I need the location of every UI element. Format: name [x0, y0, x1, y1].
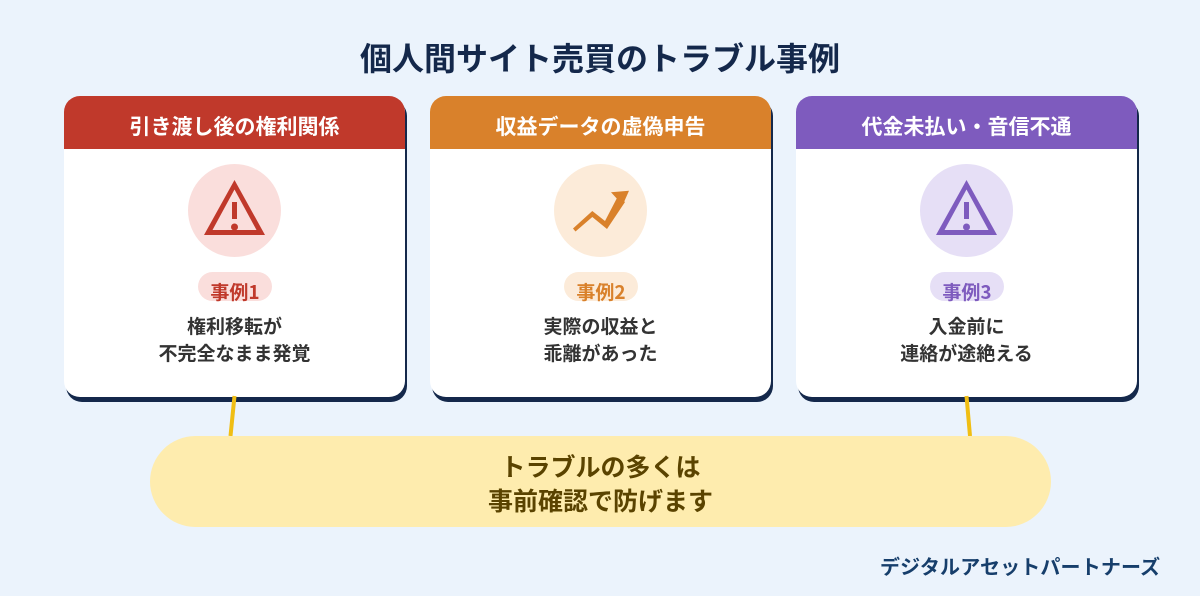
card 3 description: 入金前に: [928, 312, 1004, 339]
card 1 description: [158, 312, 310, 366]
icon: rising arrow: [573, 190, 629, 232]
card 2 description: 実際の収益と: [543, 312, 658, 339]
card 3 header: [796, 96, 1137, 149]
banner callout: トラブルの多くは: [500, 448, 700, 484]
card 1 icon circle: [188, 164, 281, 257]
card 2: [430, 96, 771, 397]
card 2 icon circle: [554, 164, 647, 257]
card 1 description: 権利移転が: [187, 312, 282, 339]
banner callout: [150, 436, 1051, 527]
card 2 header: [430, 96, 771, 149]
card 3 description: [900, 312, 1033, 366]
card shadow 2: [432, 100, 773, 402]
card 1 tag: 事例1: [210, 278, 260, 305]
card 3 header: 代金未払い・音信不通: [862, 111, 1072, 141]
card 1 header: [64, 96, 405, 149]
card shadow 1: [66, 100, 407, 402]
card 3 tag: [930, 272, 1004, 301]
card 2 tag: [564, 272, 638, 301]
card 3 icon circle: [920, 164, 1013, 257]
card 3 tag: 事例3: [942, 278, 992, 305]
card 2 tag: 事例2: [576, 278, 626, 305]
connector line right: [964, 396, 972, 436]
card 1 description: 不完全なまま発覚: [158, 339, 310, 366]
card 2 description: 乖離があった: [543, 339, 658, 366]
footer brand: デジタルアセットパートナーズ: [880, 551, 1160, 580]
icon: warning triangle: [204, 180, 265, 235]
card 3: [796, 96, 1137, 397]
icon: warning triangle: [936, 180, 997, 235]
connector line left: [228, 396, 236, 436]
card 1 header: 引き渡し後の権利関係: [130, 111, 340, 141]
card 1 tag: [198, 272, 272, 301]
banner callout: 事前確認で防げます: [488, 482, 713, 518]
card 1: [64, 96, 405, 397]
card 2 header: 収益データの虚偽申告: [496, 111, 706, 141]
title: 個人間サイト売買のトラブル事例: [360, 34, 840, 80]
card 3 description: 連絡が途絶える: [900, 339, 1033, 366]
card 2 description: [543, 312, 658, 366]
card shadow 3: [798, 100, 1139, 402]
